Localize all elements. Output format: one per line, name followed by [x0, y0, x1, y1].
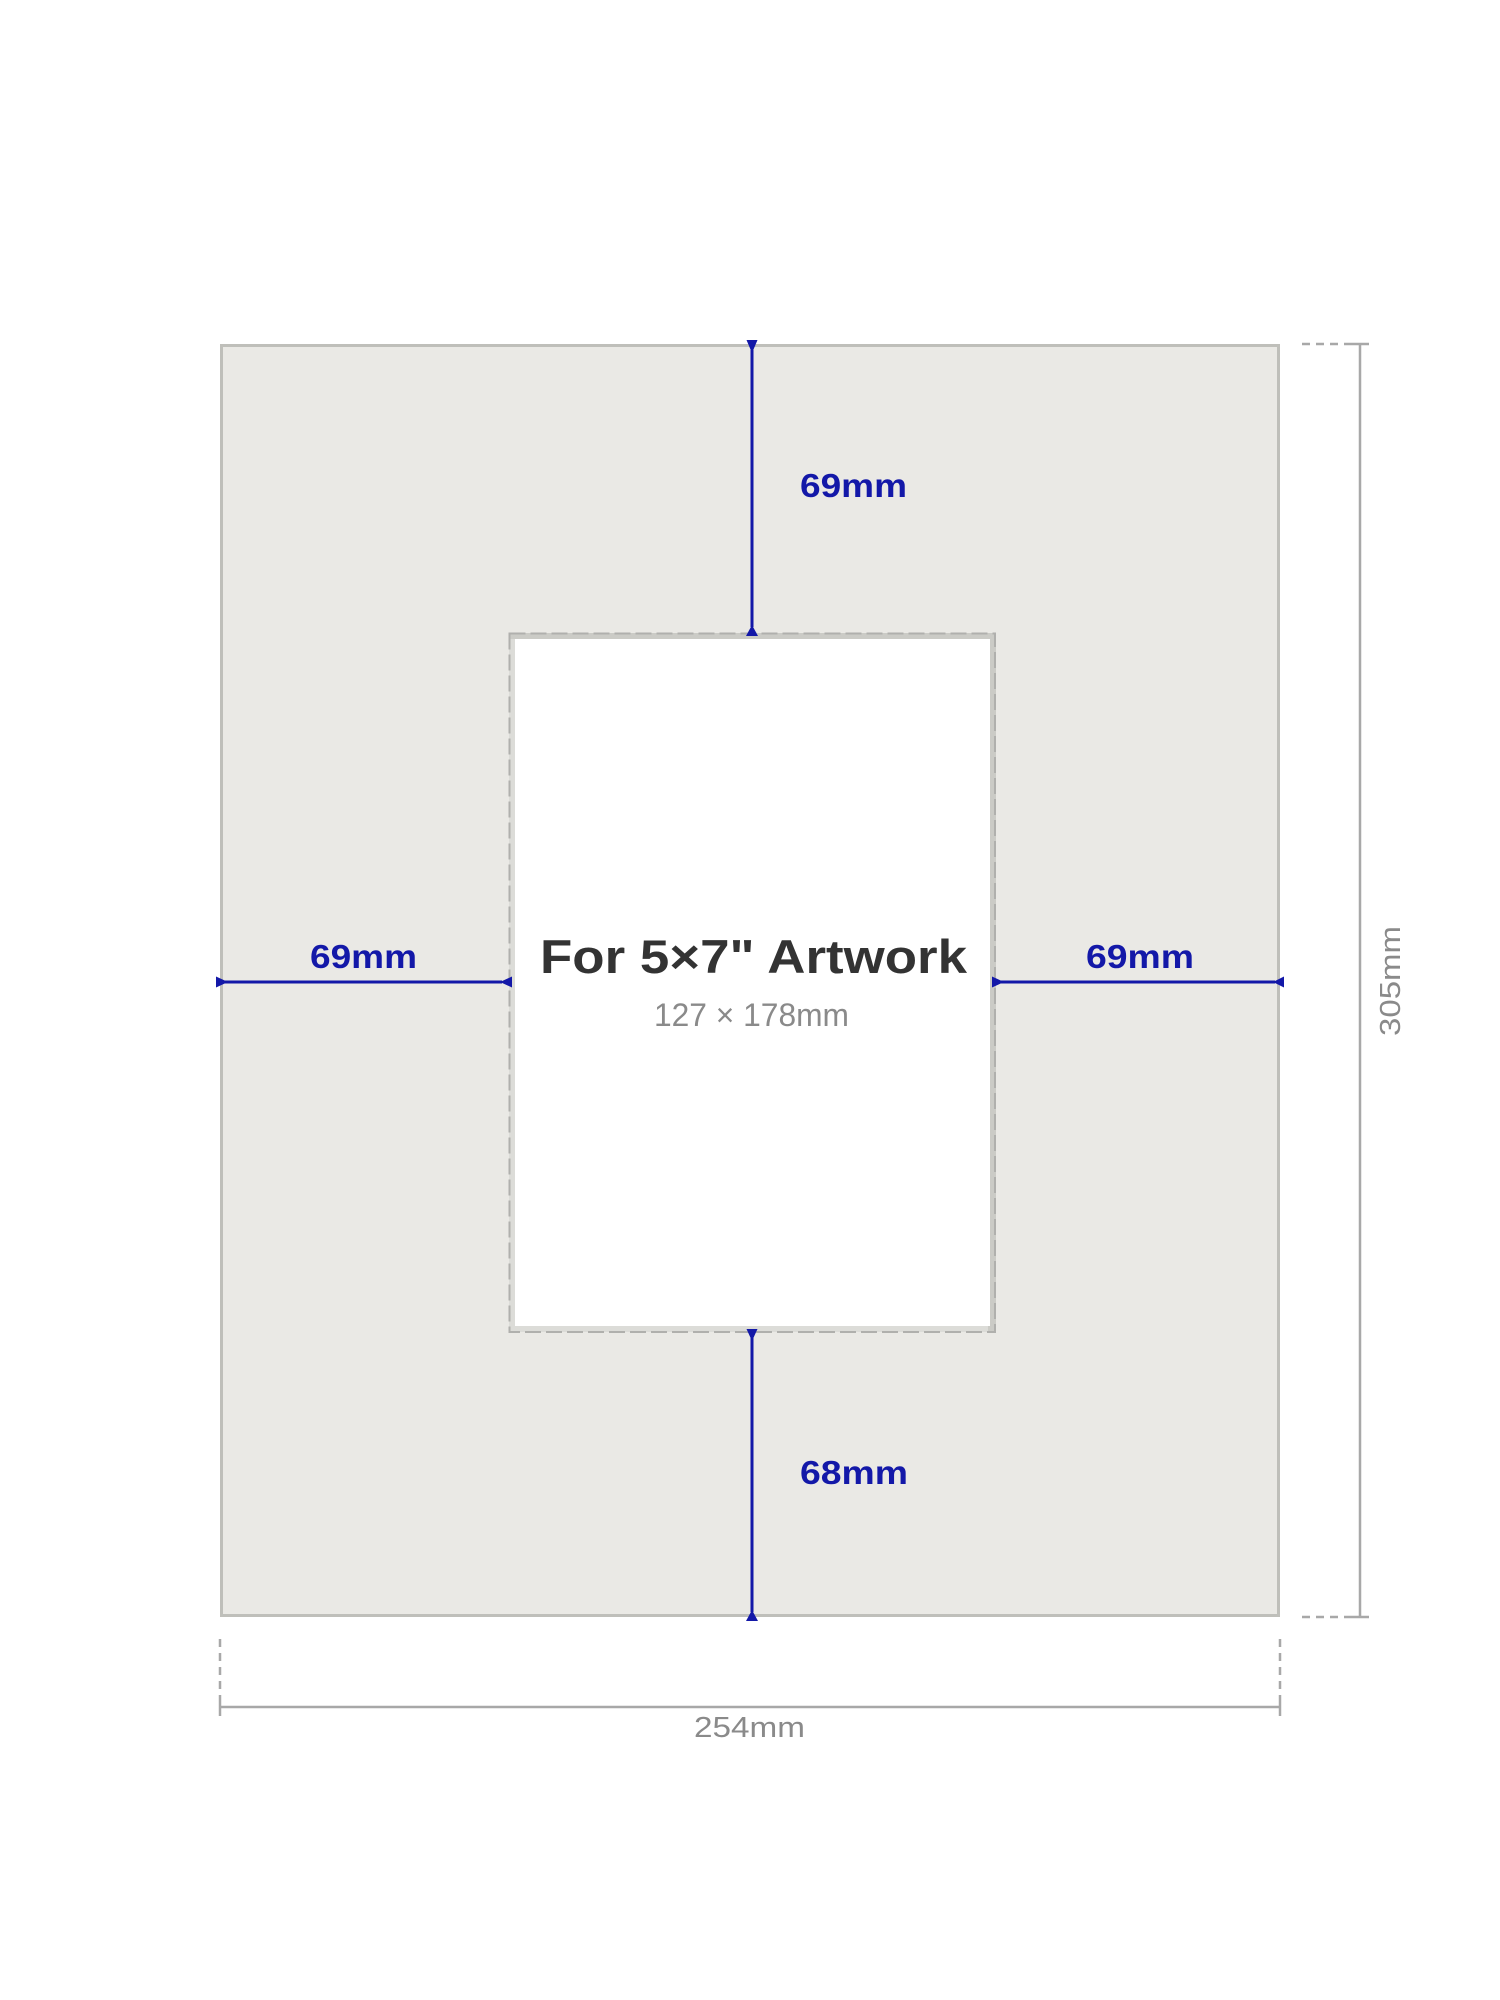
label: height: 305mm — [1375, 926, 1407, 1036]
label: left margin: 69mm — [310, 938, 417, 975]
label: width: 254mm — [694, 1712, 805, 1744]
heading: artwork size: For 5×7" Artwork — [540, 930, 968, 983]
panel: artwork window — [509, 633, 996, 1332]
label: bottom margin: 68mm — [800, 1454, 908, 1491]
dimension line: height — [1302, 344, 1369, 1617]
arrow: bottom margin — [746, 1329, 758, 1621]
label: top margin: 69mm — [800, 467, 907, 504]
label: right margin: 69mm — [1086, 938, 1194, 975]
arrow: right margin — [992, 976, 1284, 988]
dimension line: width — [220, 1639, 1280, 1716]
arrow: left margin — [216, 976, 512, 988]
text: artwork size in millimetres: 127 × 178mm — [654, 997, 849, 1033]
panel: mat board — [222, 346, 1278, 1616]
arrow: top margin — [746, 340, 758, 636]
